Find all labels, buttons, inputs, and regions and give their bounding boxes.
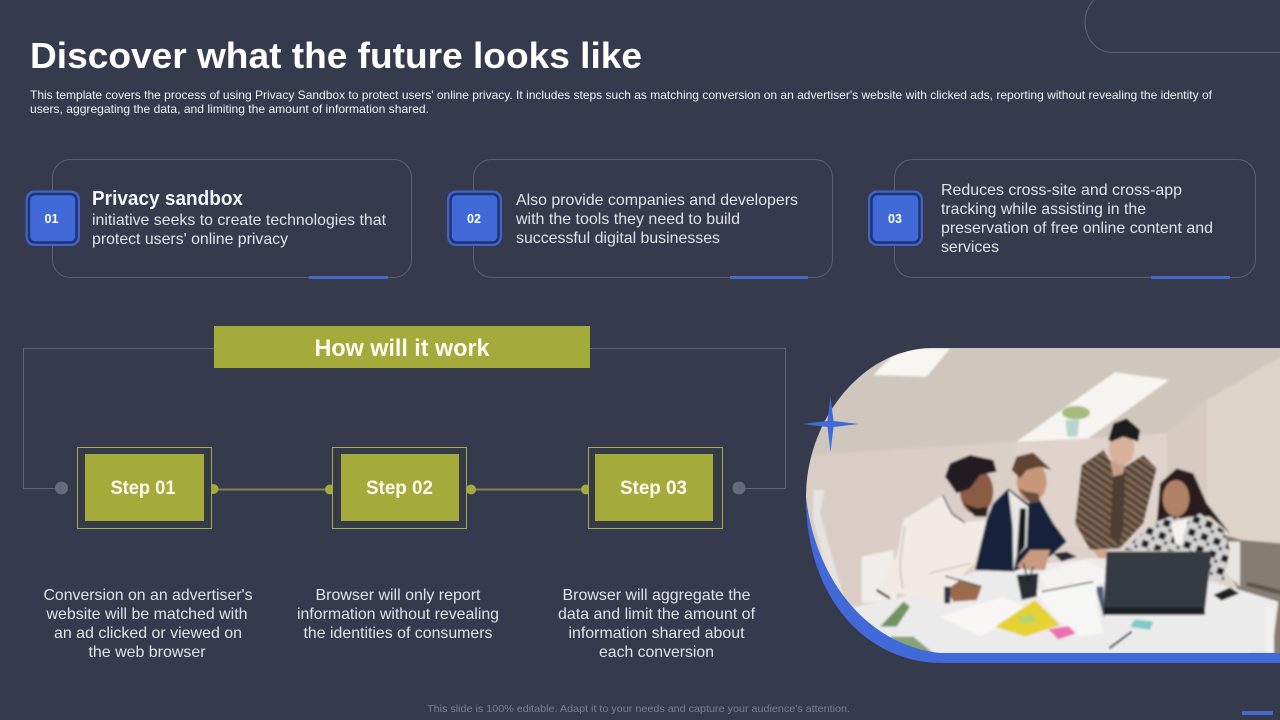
card text: successful digital businesses bbox=[516, 230, 720, 247]
card text: preservation of free online content and bbox=[941, 220, 1213, 237]
panel: cross-site tracking card bbox=[868, 160, 1256, 279]
heading: how will it work bbox=[214, 326, 590, 368]
panel: developer tools card bbox=[447, 160, 832, 279]
step 03 description: each conversion bbox=[599, 644, 714, 661]
chairs bbox=[862, 550, 897, 603]
step 02 description: the identities of consumers bbox=[304, 625, 492, 642]
connector dots and lines bbox=[55, 482, 746, 494]
person: man in navy suit bbox=[975, 453, 1067, 572]
step 03 box: Step 03 bbox=[620, 478, 687, 499]
foreground plant bbox=[880, 602, 933, 653]
intro text block: users, aggregating the data, and limiting the amount of information shared. bbox=[30, 102, 429, 116]
panel: privacy sandbox card bbox=[26, 160, 412, 279]
step 02 description bbox=[297, 587, 499, 642]
papers and desk items bbox=[940, 552, 1239, 648]
step 01 box bbox=[78, 448, 212, 528]
step 01 description: website will be matched with bbox=[46, 606, 248, 623]
badge 03 bbox=[868, 190, 923, 246]
laptop bbox=[1095, 552, 1212, 619]
card text: Privacy sandbox bbox=[92, 188, 243, 210]
card text: Reduces cross-site and cross-app bbox=[941, 182, 1182, 199]
step 01 description: the web browser bbox=[88, 644, 206, 661]
step 02 box: Step 02 bbox=[366, 478, 433, 499]
heading: how will it work: How will it work bbox=[314, 335, 490, 362]
title: Discover what the future looks like bbox=[30, 35, 642, 76]
step 01 box: Step 01 bbox=[110, 478, 176, 499]
badge 02: 02 bbox=[467, 212, 481, 226]
card text: initiative seeks to create technologies that bbox=[92, 212, 387, 229]
step 02 description: information without revealing bbox=[297, 606, 499, 623]
badge 01 bbox=[26, 190, 80, 246]
card text: protect users' online privacy bbox=[92, 231, 288, 248]
blue crescent under photo bbox=[806, 497, 1280, 663]
intro text block bbox=[30, 88, 1213, 116]
card text: tracking while assisting in the bbox=[941, 201, 1146, 218]
card text: with the tools they need to build bbox=[515, 211, 740, 228]
step 02 description: Browser will only report bbox=[316, 587, 481, 604]
table top bbox=[840, 557, 1278, 653]
badge 01: 01 bbox=[45, 212, 58, 226]
footer note: This slide is 100% editable. Adapt it to your needs and capture your audience's attention. bbox=[427, 703, 850, 715]
icon: four-point star bbox=[802, 396, 859, 452]
photo: team around a table bbox=[806, 348, 1280, 653]
step 03 description bbox=[558, 587, 756, 661]
card text bbox=[941, 182, 1213, 256]
page marker bbox=[1242, 711, 1273, 715]
badge 03: 03 bbox=[888, 212, 902, 226]
step 01 description: an ad clicked or viewed on bbox=[54, 625, 242, 642]
step 03 description: information shared about bbox=[568, 625, 745, 642]
badge 02 bbox=[447, 190, 502, 246]
step 03 description: Browser will aggregate the bbox=[562, 587, 751, 604]
step 02 box bbox=[332, 448, 466, 528]
intro text block: This template covers the process of using Privacy Sandbox to protect users' online privacy. It includes steps such as matching conversion on an advertiser's website with clicked ads, reporting without revealing the identity of bbox=[30, 88, 1213, 102]
person: woman in plaid jacket bbox=[1123, 468, 1230, 583]
person: man in white sweater bbox=[875, 455, 997, 603]
step 03 description: data and limit the amount of bbox=[558, 606, 756, 623]
step 01 description: Conversion on an advertiser's bbox=[44, 587, 252, 604]
card text: Also provide companies and developers bbox=[516, 192, 798, 209]
person: woman in tweed jacket bbox=[1075, 418, 1157, 558]
card text: services bbox=[941, 239, 999, 256]
step 03 box bbox=[588, 448, 722, 528]
card text bbox=[515, 192, 798, 247]
step 01 description bbox=[44, 587, 252, 661]
card text bbox=[92, 188, 387, 248]
plant and pot bbox=[1062, 406, 1090, 437]
process frame connector bbox=[24, 348, 786, 488]
